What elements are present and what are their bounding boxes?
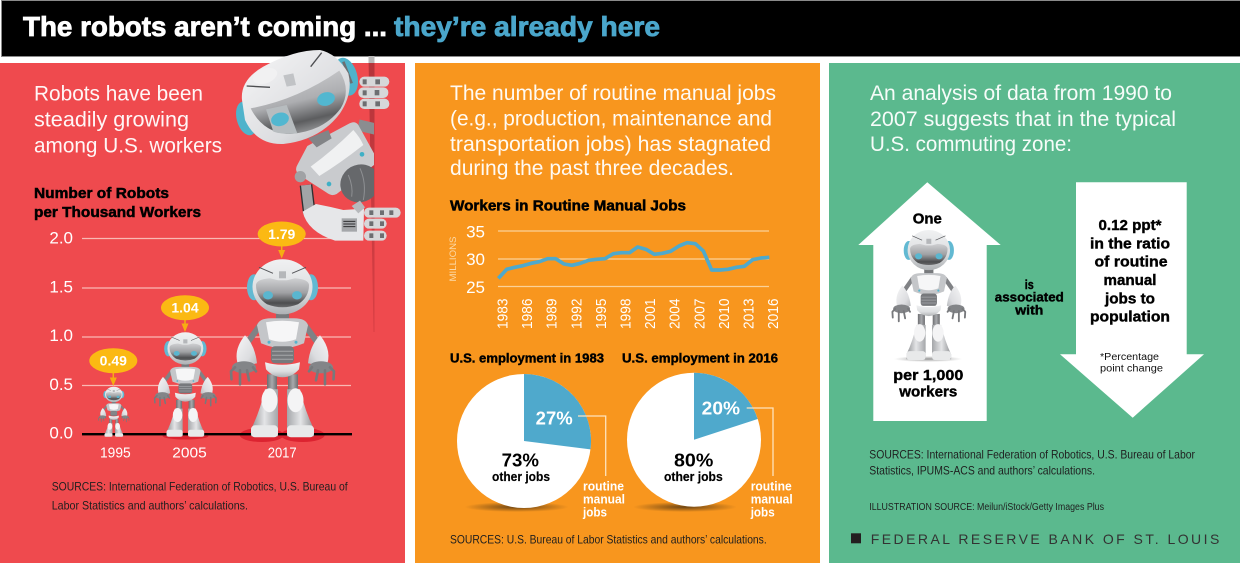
pie chart: employment in 2016: jobs (750, 505, 775, 520)
down arrow: 0.12 ppt change: population (1090, 309, 1170, 326)
line chart: workers in routine manual jobs: 2004 (667, 298, 684, 329)
line chart: workers in routine manual jobs: 2010 (716, 298, 733, 329)
pie chart: employment in 1983: 27% (536, 408, 573, 428)
title banner (1, 0, 1240, 57)
red panel intro text (34, 83, 222, 157)
connector text: is associated with: associated (995, 290, 1064, 305)
down arrow: 0.12 ppt change: point change (1100, 364, 1163, 375)
line chart: workers in routine manual jobs: 2007 (691, 298, 708, 329)
line chart: workers in routine manual jobs: 2001 (642, 298, 659, 329)
pie chart: employment in 1983: manual (583, 491, 625, 506)
green panel sources: ILLUSTRATION SOURCE: Meilun/iStock/Getty Images Plus (869, 502, 1104, 513)
line chart: workers in routine manual jobs: MILLIONS (448, 236, 459, 282)
chart: robots per thousand workers: 1.5 (49, 278, 73, 297)
red panel sources: Labor Statistics and authors’ calculations. (52, 498, 248, 512)
robot 2005 with value (155, 295, 216, 437)
connector text: is associated with: with (1014, 302, 1043, 317)
up arrow: one robot per 1,000 workers: workers (898, 384, 957, 401)
pie chart: employment in 1983: 73% (502, 451, 539, 471)
line chart: workers in routine manual jobs: 1992 (568, 298, 585, 329)
down arrow: 0.12 ppt change: manual (1104, 272, 1156, 289)
line chart: workers in routine manual jobs: 30 (466, 250, 485, 269)
pie chart: employment in 1983: U.S. employment in 1983 (450, 351, 604, 366)
red panel intro text: among U.S. workers (34, 134, 222, 157)
pie chart: employment in 1983: jobs (582, 505, 607, 520)
down arrow: 0.12 ppt change: 0.12 ppt* (1098, 217, 1162, 234)
robot 1995 with value (89, 348, 137, 437)
pie chart: employment in 2016: 80% (674, 451, 713, 471)
down arrow: 0.12 ppt change: of routine (1094, 254, 1168, 271)
line chart: workers in routine manual jobs: 1998 (618, 298, 634, 329)
up arrow: one robot per 1,000 workers (858, 182, 1001, 421)
red panel intro text: steadily growing (34, 109, 189, 132)
chart: robots per thousand workers: 0.0 (49, 423, 73, 442)
line chart: workers in routine manual jobs: 1983 (494, 298, 512, 329)
connector text: is associated with (995, 277, 1064, 317)
panel: green background (829, 63, 1240, 563)
chart: robots per thousand workers: 2005 (172, 444, 207, 461)
line chart: workers in routine manual jobs: 2016 (765, 298, 782, 329)
green panel intro text (870, 82, 1176, 156)
line chart: workers in routine manual jobs: 2013 (740, 298, 758, 329)
down arrow: 0.12 ppt change: *Percentage (1100, 352, 1159, 363)
green panel intro text: U.S. commuting zone: (870, 133, 1072, 156)
green panel sources (869, 447, 1195, 513)
pie chart: employment in 2016: 20% (702, 398, 740, 418)
chart: robots per thousand workers: 2.0 (49, 228, 73, 247)
title banner: they’re already here (394, 11, 660, 42)
orange panel intro text (450, 82, 776, 180)
pie chart: employment in 2016: other jobs (664, 469, 723, 484)
chart: robots per thousand workers: 2017 (268, 444, 297, 461)
chart: robots per thousand workers: 1.0 (49, 326, 73, 345)
green panel intro text: An analysis of data from 1990 to (870, 82, 1172, 105)
line chart: workers in routine manual jobs: 1995 (593, 298, 610, 329)
orange panel intro text: (e.g., production, maintenance and (450, 107, 772, 130)
chart heading: robots per thousand workers: Number of Robots (34, 185, 169, 202)
green panel sources: SOURCES: International Federation of Robotics, U.S. Bureau of Labor (869, 447, 1195, 461)
connector text: is associated with: is (1025, 277, 1034, 292)
pie chart: employment in 2016: routine (751, 478, 792, 493)
up arrow: one robot per 1,000 workers: One (913, 210, 942, 227)
pie chart: employment in 2016 (622, 351, 793, 520)
pie chart: employment in 1983 (450, 351, 625, 520)
robot 2017 with value (231, 222, 334, 437)
green panel sources: Statistics, IPUMS-ACS and authors’ calculations. (869, 464, 1095, 478)
orange panel sources: SOURCES: U.S. Bureau of Labor Statistics and authors’ calculations. (450, 532, 767, 546)
pie chart: employment in 2016: manual (751, 491, 793, 506)
robot 2017 with value: 1.79 (268, 226, 296, 242)
illustration: robot peeking around slit (233, 50, 401, 332)
line chart: workers in routine manual jobs: 1986 (519, 298, 536, 329)
orange panel intro text: transportation jobs) has stagnated (450, 133, 771, 156)
title banner: The robots aren’t coming ... (23, 11, 387, 42)
line chart heading: Workers in Routine Manual Jobs (450, 198, 686, 215)
chart: robots per thousand workers: 0.5 (49, 375, 73, 394)
robot 2005 with value: 1.04 (171, 300, 199, 316)
down arrow: 0.12 ppt change (1060, 182, 1204, 418)
orange panel intro text: during the past three decades. (450, 157, 734, 180)
orange panel intro text: The number of routine manual jobs (450, 82, 776, 105)
chart heading: robots per thousand workers (34, 185, 201, 221)
down arrow: 0.12 ppt change: in the ratio (1090, 235, 1170, 252)
pie chart: employment in 1983: other jobs (492, 469, 550, 484)
chart: robots per thousand workers: 1995 (100, 444, 131, 461)
line chart: workers in routine manual jobs (448, 223, 782, 329)
footer: Federal Reserve Bank of St. Louis: FEDERAL RESERVE BANK OF ST. LOUIS (871, 531, 1219, 547)
chart: robots per thousand workers (49, 222, 352, 461)
down arrow: 0.12 ppt change: jobs to (1104, 290, 1155, 307)
red panel intro text: Robots have been (34, 83, 203, 106)
pie chart: employment in 2016: U.S. employment in 2016 (622, 351, 778, 366)
red panel sources: SOURCES: International Federation of Robotics, U.S. Bureau of (52, 480, 348, 494)
panel: orange background (415, 63, 820, 563)
pie chart: employment in 1983: routine (583, 478, 624, 493)
up arrow: one robot per 1,000 workers: per 1,000 (893, 367, 963, 384)
line chart: workers in routine manual jobs: 1989 (544, 298, 561, 329)
chart heading: robots per thousand workers: per Thousand Workers (34, 204, 201, 221)
green panel intro text: 2007 suggests that in the typical (870, 108, 1176, 131)
line chart: workers in routine manual jobs: 35 (466, 223, 485, 242)
panel: red background (0, 63, 405, 563)
red panel sources (52, 480, 348, 512)
line chart: workers in routine manual jobs: 25 (466, 278, 485, 297)
robot 1995 with value: 0.49 (100, 353, 127, 369)
